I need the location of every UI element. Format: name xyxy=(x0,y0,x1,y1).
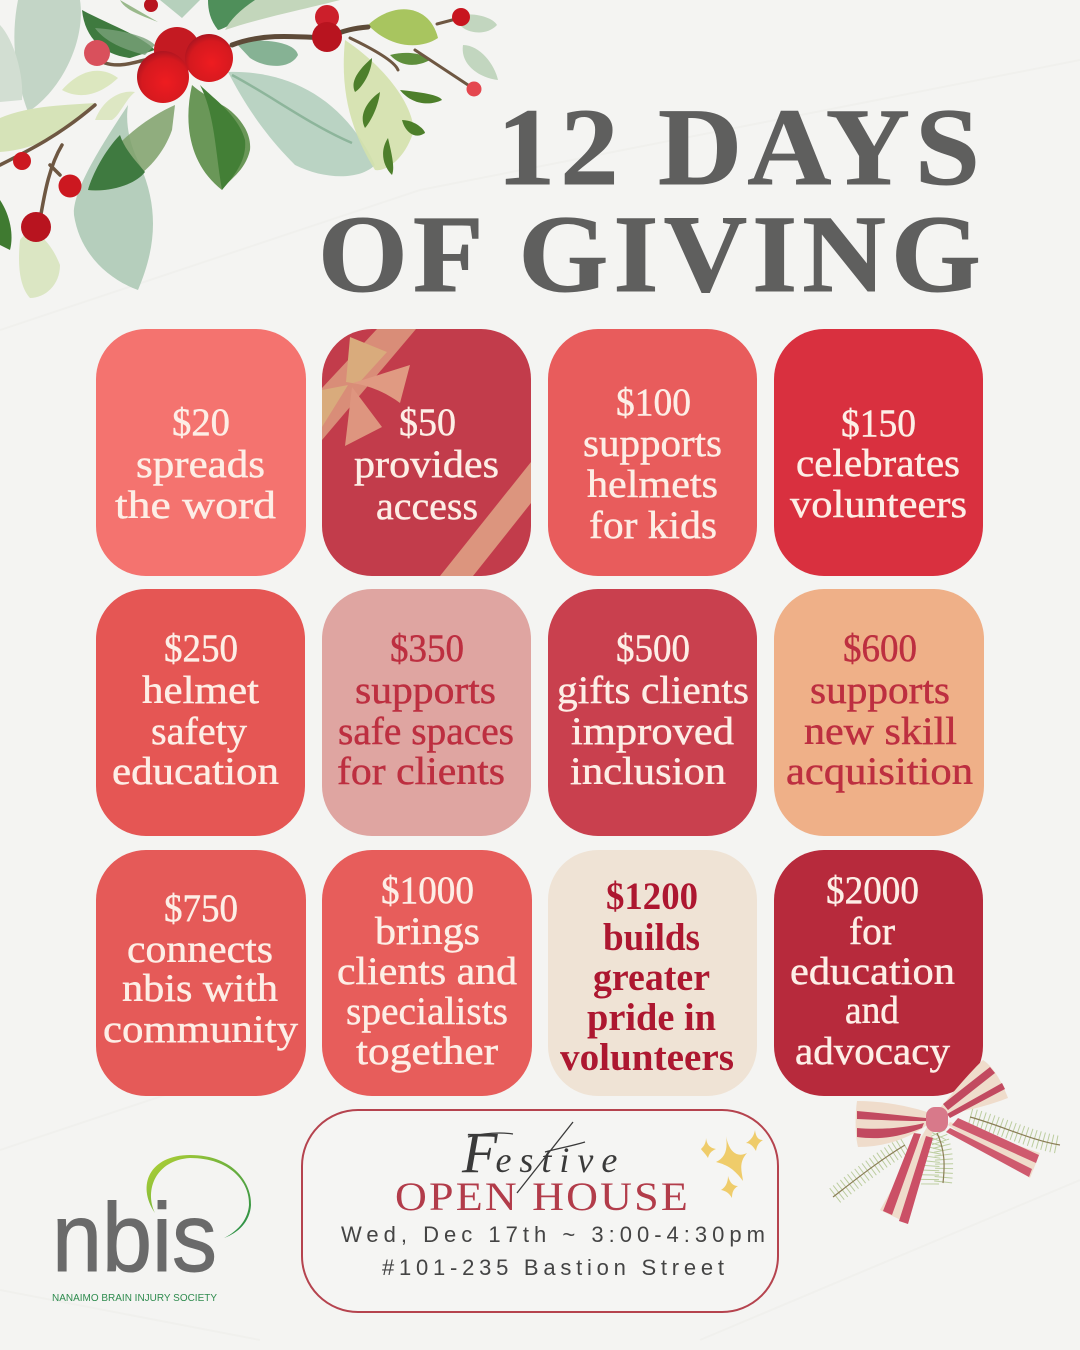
foliage: holly branch with red berries xyxy=(0,0,498,298)
card: $1000: specialists xyxy=(346,990,508,1033)
card: $500: $500 xyxy=(616,627,690,670)
icon: striped ribbon bow with pine xyxy=(833,1060,1060,1224)
card: $500: improved xyxy=(571,710,735,753)
card: $750: community xyxy=(103,1008,299,1051)
card: $100: $100 xyxy=(616,381,691,424)
card: $150: volunteers xyxy=(790,483,967,526)
card: $20: the word xyxy=(115,484,277,527)
card: $1200: $1200 xyxy=(606,875,698,918)
card: $2000: advocacy xyxy=(795,1030,951,1073)
card: $50 with gift ribbon: provides xyxy=(354,443,499,486)
card: $600: acquisition xyxy=(786,750,973,793)
card: $350: supports xyxy=(355,669,496,712)
card: $250: helmet xyxy=(142,669,259,712)
card: $20: spreads xyxy=(136,443,265,486)
card: $250: education xyxy=(112,750,279,793)
card: $150 xyxy=(774,329,983,576)
title xyxy=(318,86,986,315)
card: $1200 xyxy=(548,850,757,1096)
card: $2000 xyxy=(774,850,983,1096)
card: $150: celebrates xyxy=(796,442,960,485)
card: $500: inclusion xyxy=(570,750,726,793)
card: $20 xyxy=(96,329,306,576)
card: $1000: $1000 xyxy=(381,869,474,912)
card: $750: nbis with xyxy=(122,967,278,1010)
card: $600: new skill xyxy=(804,710,957,753)
card: $750: $750 xyxy=(164,887,238,930)
card: $750 xyxy=(96,850,306,1096)
card: $1200: volunteers xyxy=(560,1036,734,1079)
card: $1000: clients and xyxy=(337,950,518,993)
card: $600: $600 xyxy=(843,627,917,670)
logo: nbis xyxy=(52,1155,251,1304)
card: $100: for kids xyxy=(589,504,717,547)
card: $750: connects xyxy=(127,928,273,971)
card: $350: safe spaces xyxy=(338,710,514,753)
card: $100 xyxy=(548,329,757,576)
card: $600 xyxy=(774,589,984,836)
title: 12 DAYS xyxy=(497,86,985,208)
card: $20: $20 xyxy=(172,401,230,444)
card: $1200: builds xyxy=(603,916,700,959)
card: $100: helmets xyxy=(587,463,718,506)
gift bow and ribbon xyxy=(322,329,531,576)
card: $1000: together xyxy=(356,1030,498,1073)
heading: open house: OPEN HOUSE xyxy=(395,1174,690,1219)
card: $500: gifts clients xyxy=(557,669,749,712)
card: $2000: for xyxy=(849,910,895,953)
logo: nbis: nbis xyxy=(52,1183,217,1292)
card: $2000: education xyxy=(790,950,955,993)
card: $500 xyxy=(548,589,757,836)
card: $100: supports xyxy=(583,422,722,465)
address: #101-235 Bastion Street xyxy=(382,1255,724,1280)
card: $350: for clients xyxy=(337,750,505,793)
card: $250 xyxy=(96,589,305,836)
card: $50 with gift ribbon: access xyxy=(376,485,478,528)
card: $2000: $2000 xyxy=(826,869,919,912)
card: $50 with gift ribbon xyxy=(322,329,531,576)
card: $1200: greater xyxy=(593,956,710,999)
event panel: festive open house xyxy=(302,1110,778,1312)
date and time: Wed, Dec 17th ~ 3:00-4:30pm xyxy=(341,1222,765,1247)
card: $1000: brings xyxy=(375,910,480,953)
card: $150: $150 xyxy=(841,402,916,445)
title: OF GIVING xyxy=(318,193,986,315)
script heading: Festive: Festive xyxy=(461,1120,625,1185)
card: $1200: pride in xyxy=(587,996,716,1039)
card: $2000: and xyxy=(845,989,899,1032)
card: $350 xyxy=(322,589,531,836)
card: $600: supports xyxy=(810,669,950,712)
icon: gold sparkles xyxy=(701,1130,763,1198)
card: $250: $250 xyxy=(164,627,238,670)
logo: nbis: NANAIMO BRAIN INJURY SOCIETY xyxy=(52,1293,217,1304)
card: $250: safety xyxy=(151,710,248,753)
card: $350: $350 xyxy=(390,627,464,670)
card: $50 with gift ribbon: $50 xyxy=(399,401,456,444)
card: $1000 xyxy=(322,850,532,1096)
